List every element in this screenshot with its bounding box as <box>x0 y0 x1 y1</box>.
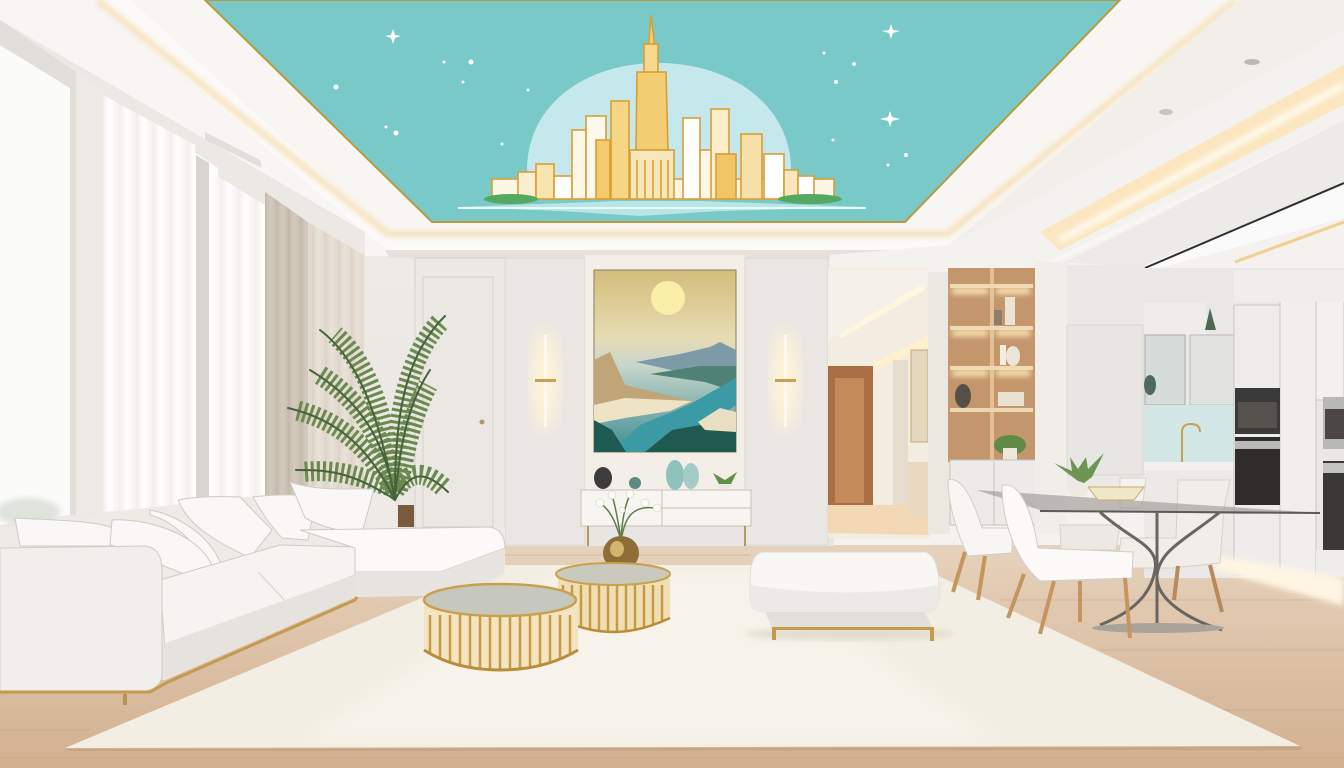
table base <box>1100 512 1222 630</box>
ceiling tray with cove lighting <box>95 0 1344 272</box>
mural: skyline <box>492 15 834 199</box>
wall painting <box>594 270 736 452</box>
kitchen <box>1144 268 1344 606</box>
dining chairs: rear <box>1060 478 1230 568</box>
wall column beside shelf <box>928 272 950 534</box>
right wall column <box>1035 262 1144 534</box>
floor <box>0 545 1344 768</box>
dining chair: front <box>1002 485 1133 638</box>
mural: central tower <box>630 15 674 199</box>
window: outdoor view <box>0 45 70 525</box>
dining table and chairs <box>948 453 1320 638</box>
floor plant <box>288 316 448 527</box>
coffee table: rear <box>556 563 670 632</box>
sheer curtains <box>103 95 195 512</box>
wall sconces <box>531 330 799 430</box>
mural: stars <box>334 24 908 166</box>
sofa: rear shadow and back <box>0 493 505 692</box>
beige drapes <box>265 192 308 495</box>
hallway <box>828 268 930 538</box>
tall cabinets <box>1234 305 1280 575</box>
door <box>415 258 505 528</box>
sofa: seat and chaise <box>160 545 355 650</box>
upper cabinets <box>1145 335 1185 405</box>
sofa <box>0 482 505 705</box>
back wall panels <box>415 255 828 545</box>
ovens <box>1235 388 1280 434</box>
built-in shelf <box>948 268 1040 525</box>
vase with flowers <box>596 490 661 570</box>
backsplash <box>1144 405 1234 463</box>
ceiling mural: teal panel <box>205 0 1120 222</box>
mural: islands and water <box>484 194 538 204</box>
left window wall <box>0 20 365 545</box>
ottoman <box>745 552 955 641</box>
plant: stems <box>288 316 448 500</box>
sofa: left arm <box>0 546 162 692</box>
coffee table: front <box>424 584 578 670</box>
mural: pale dome <box>527 63 791 200</box>
centrepiece <box>1088 487 1144 500</box>
sofa: cushions <box>15 482 374 582</box>
table top <box>976 490 1320 514</box>
dining chair: left <box>948 479 1012 600</box>
plant: leaflets <box>295 322 444 490</box>
floor planks <box>0 555 1344 758</box>
rug <box>65 565 1302 751</box>
back wall <box>364 256 834 546</box>
console with vases <box>581 460 751 546</box>
